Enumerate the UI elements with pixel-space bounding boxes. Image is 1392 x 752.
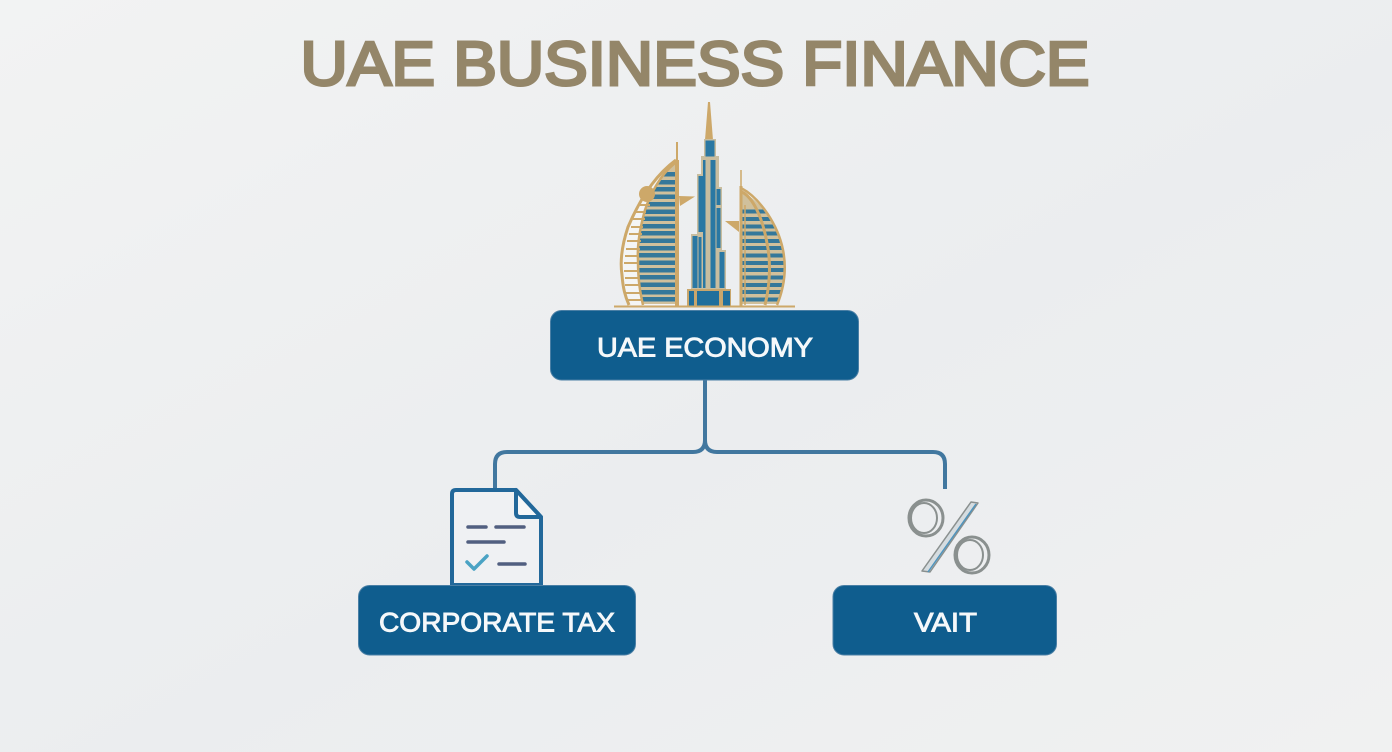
icon: tax document: [452, 490, 541, 585]
box: VAIT: VAIT: [914, 608, 977, 638]
icon: percent sign: [909, 500, 989, 573]
title: UAE BUSINESS FINANCE: [300, 30, 1090, 99]
central tower: [687, 102, 731, 306]
box: UAE Economy: [550, 310, 858, 380]
connector lines: [495, 380, 945, 490]
ground line: [614, 306, 795, 308]
left sail building: [621, 142, 695, 306]
box: UAE Economy: UAE ECONOMY: [597, 332, 813, 362]
box: Corporate Tax: CORPORATE TAX: [379, 608, 615, 638]
icon: Dubai skyline: [614, 102, 795, 306]
box: VAIT: [833, 586, 1056, 655]
right sail building: [725, 170, 788, 306]
infographic canvas: [304, 40, 1088, 656]
box: Corporate Tax: [358, 586, 636, 655]
